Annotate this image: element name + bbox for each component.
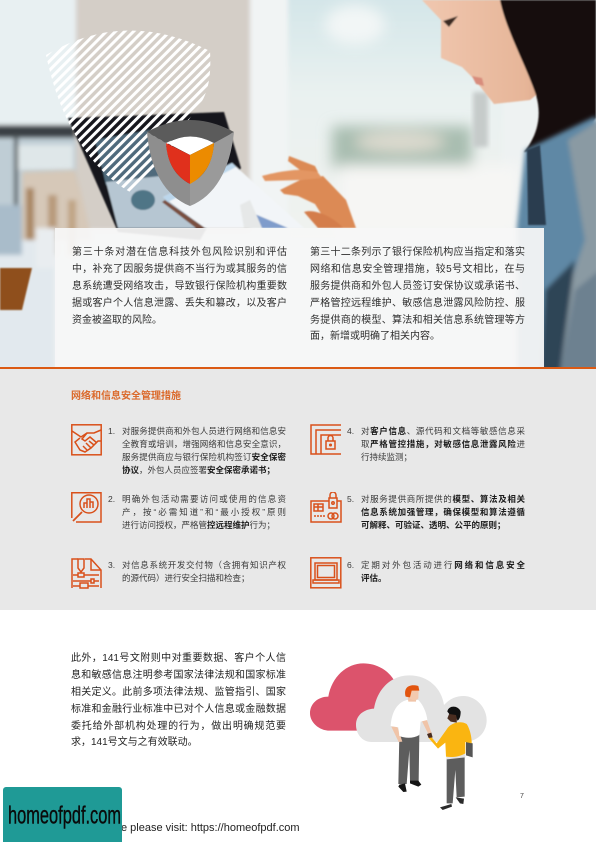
icon: handshake — [71, 424, 102, 456]
icon: card with lock — [310, 492, 342, 523]
page number: 7 — [520, 793, 524, 800]
text block: article 141 supplement: 求，141号文与之有效联动。 — [71, 737, 198, 748]
icon: laptop — [310, 557, 342, 589]
panel: network and information security measures: 可解释、可验证、透明、公平的原则； — [361, 520, 506, 530]
footer link text: e please visit: https://homeofpdf.com — [121, 822, 300, 834]
text block: article 30: 据或客户个人信息泄露、丢失和篡改，以及客户 — [72, 298, 287, 309]
panel: network and information security measures: 对服务提供商和外包人员进行网络和信息安 — [122, 426, 286, 436]
pink cloud — [310, 663, 395, 731]
text block: article 141 supplement: 息和敏感信息注明参考国家法律法规和国家标准 — [71, 670, 286, 681]
panel: network and information security measures — [0, 367, 596, 610]
text block: article 30: 资金被盗取的风险。 — [72, 315, 162, 326]
item 6: 6. — [347, 560, 354, 570]
hero photo: woman using a tablet — [0, 0, 596, 367]
shield logo — [147, 120, 234, 206]
text block: article 141 supplement: 此外，141号文附则中对重要数据、客户个人信 — [71, 653, 286, 664]
panel: network and information security measures: 取严格管控措施，对敏感信息泄露风险进 — [361, 439, 525, 449]
illustration: two people shaking hands in front of clouds — [310, 663, 487, 810]
panel: network and information security measures: 对服务提供商所提供的模型、算法及相关 — [361, 494, 525, 504]
panel heading: 网络和信息安全管理措施 — [71, 391, 181, 402]
text block: article 141 supplement: 相关定义。此前多项法律法规、监管指引、国家 — [71, 687, 286, 698]
panel: network and information security measures: 对信息系统开发交付物（含拥有知识产权 — [122, 560, 286, 570]
text block: article 32: 第三十二条列示了银行保险机构应当指定和落实 — [310, 247, 525, 258]
panel: network and information security measures: 定期对外包活动进行网络和信息安全 — [361, 560, 525, 570]
man in white shirt — [391, 685, 432, 792]
panel: network and information security measures: 产，按“必需知道”和“最小授权”原则 — [122, 507, 286, 517]
text block: article 32: 严格管控远程维护、敏感信息泄露风险防控、服 — [310, 298, 525, 309]
panel: network and information security measures: 评估。 — [361, 573, 387, 583]
grey cloud — [356, 675, 487, 742]
text block: article 32: 面，新增或明确了相关内容。 — [310, 331, 440, 342]
text block: article 141 supplement: 标准和金融行业标准中已对个人信息或金融数据 — [71, 704, 286, 715]
panel: network and information security measures: 明确外包活动需要访问或使用的信息资 — [122, 494, 286, 504]
text block: article 141 supplement — [71, 652, 286, 748]
woman — [422, 0, 596, 152]
left stool and table — [0, 170, 92, 370]
icon: magnifier with chart — [71, 492, 102, 523]
panel: network and information security measures: 协议，外包人员应签署安全保密承诺书； — [122, 465, 275, 475]
panel: network and information security measures: 进行访问授权，严格管控远程维护行为； — [122, 520, 275, 530]
text block: article 32: 网络和信息安全管理措施，较5号文相比，在与 — [310, 264, 525, 275]
text block: article 141 supplement: 委托给外部机构处理的行为，做出明确规范要 — [71, 721, 286, 732]
panel: network and information security measures: 服务提供商应与银行保险机构签订安全保密 — [122, 452, 286, 462]
translucent lower backdrop in photo — [55, 228, 544, 367]
hatched shield outline — [46, 30, 210, 192]
text block: article 30: 第三十条对潜在信息科技外包风险识别和评估 — [72, 247, 287, 258]
panel: network and information security measures: 的源代码）进行安全扫描和检查； — [122, 573, 250, 583]
watermark badge — [3, 787, 122, 842]
person in yellow sweater — [427, 707, 473, 810]
panel: network and information security measures: 对客户信息、源代码和文档等敏感信息采 — [361, 426, 525, 436]
text block: article 30: 息系统遭受网络攻击，导致银行保险机构重要数 — [72, 281, 287, 292]
item 5: 5. — [347, 494, 354, 504]
hand — [262, 156, 356, 228]
text block: article 30 — [72, 246, 287, 326]
text block: article 32 — [310, 246, 525, 342]
item 3: 3. — [108, 560, 115, 570]
panel: network and information security measures: 全教育或培训，增强网络和信息安全意识， — [122, 439, 286, 449]
item 4: 4. — [347, 426, 354, 436]
panel: network and information security measures: 行持续监测； — [361, 452, 412, 462]
text block: article 30: 中，补充了因服务提供商不当行为或其服务的信 — [72, 264, 287, 275]
icon: nested folders with lock — [310, 424, 341, 455]
icon: document with sliders — [71, 558, 102, 589]
laptop — [68, 112, 304, 240]
panel: network and information security measures: 信息系统加强管理，确保模型和算法遵循 — [361, 507, 525, 517]
watermark badge: homeofpdf.com — [8, 802, 121, 830]
item 2: 2. — [108, 494, 115, 504]
text block: article 32: 服务提供商和外包人员签订安保协议或承诺书、 — [310, 281, 525, 292]
text block: article 32: 务提供商的模型、算法和相关信息系统管理等方 — [310, 315, 525, 326]
item 1: 1. — [108, 426, 115, 436]
